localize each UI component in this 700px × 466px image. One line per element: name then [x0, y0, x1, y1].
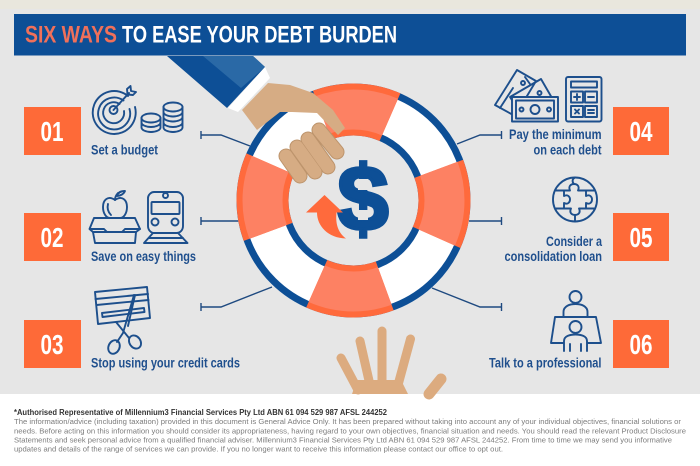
- icon: cut credit card: [95, 287, 150, 356]
- footer disclaimer: Statements and seek personal advice from a qualified financial adviser. Millennium3 Financial Services Pty Ltd ABN 61 094 529 987 AFSL 244252. From time to time we may send you informative: [14, 436, 672, 444]
- icon: calculator: [566, 77, 602, 122]
- step 05 badge: 05: [630, 222, 652, 253]
- icon: train: [144, 192, 188, 243]
- title banner: [14, 14, 686, 56]
- connector lines: [201, 131, 502, 311]
- icon: professional meeting: [551, 291, 601, 351]
- icon: orange up arrow: [306, 195, 346, 238]
- step 01 badge: [24, 107, 81, 155]
- label: talk to a professional: Talk to a professional: [489, 354, 602, 370]
- step 03 badge: 03: [40, 329, 64, 360]
- label: pay the minimum: Pay the minimum: [509, 126, 602, 142]
- label: set a budget: Set a budget: [91, 142, 158, 158]
- step 06 badge: 06: [630, 329, 652, 360]
- footer disclaimer: updates and details of the range of services we can provide. If you no longer want to receive this information please contact our office to opt out.: [14, 444, 503, 454]
- step 04 badge: 04: [630, 116, 653, 147]
- label: pay the minimum: on each debt: [534, 142, 602, 158]
- icon: apple and lunchbox: [90, 191, 140, 243]
- label: save on easy things: Save on easy things: [91, 248, 196, 264]
- label: consider a consolidation loan: [504, 233, 602, 264]
- title banner: SIX WAYS: [25, 22, 117, 48]
- label: stop using credit cards: Stop using your credit cards: [91, 354, 240, 370]
- icon: target and coins: [93, 86, 182, 134]
- step 02 badge: [24, 213, 81, 261]
- step 05 badge: [613, 213, 669, 261]
- step 03 badge: [24, 320, 81, 368]
- title banner: TO EASE YOUR DEBT BURDEN: [122, 22, 397, 48]
- footer disclaimer: *Authorised Representative of Millennium3 Financial Services Pty Ltd ABN 61 094 529 987 AFSL 244252: [14, 408, 388, 417]
- step 04 badge: [613, 107, 669, 155]
- lifebuoy ring: [240, 87, 467, 314]
- icon: puzzle globe: [553, 178, 597, 222]
- label: consider a consolidation loan: consolidation loan: [504, 248, 602, 264]
- suit sleeve and top hand: [167, 56, 345, 176]
- footer disclaimer: The information/advice (including taxation) provided in this document is General Advice Only. It has been prepared without taking into account any of your individual objectives, financial solutions or: [14, 417, 681, 426]
- icon: dollar sign: $: [337, 148, 389, 250]
- footer disclaimer: [14, 408, 686, 454]
- label: pay the minimum: [509, 126, 602, 158]
- footer disclaimer: needs. Before acting on this information you should consider its appropriateness, having regard to your own objectives, financial situation and needs. You should read the relevant Product Disclosure: [14, 426, 686, 436]
- step 01 badge: 01: [40, 116, 64, 147]
- step 06 badge: [613, 320, 669, 368]
- step 02 badge: 02: [40, 222, 64, 253]
- label: consider a consolidation loan: Consider a: [546, 233, 602, 249]
- bottom hand: [341, 331, 441, 394]
- icon: banknotes: [495, 70, 558, 122]
